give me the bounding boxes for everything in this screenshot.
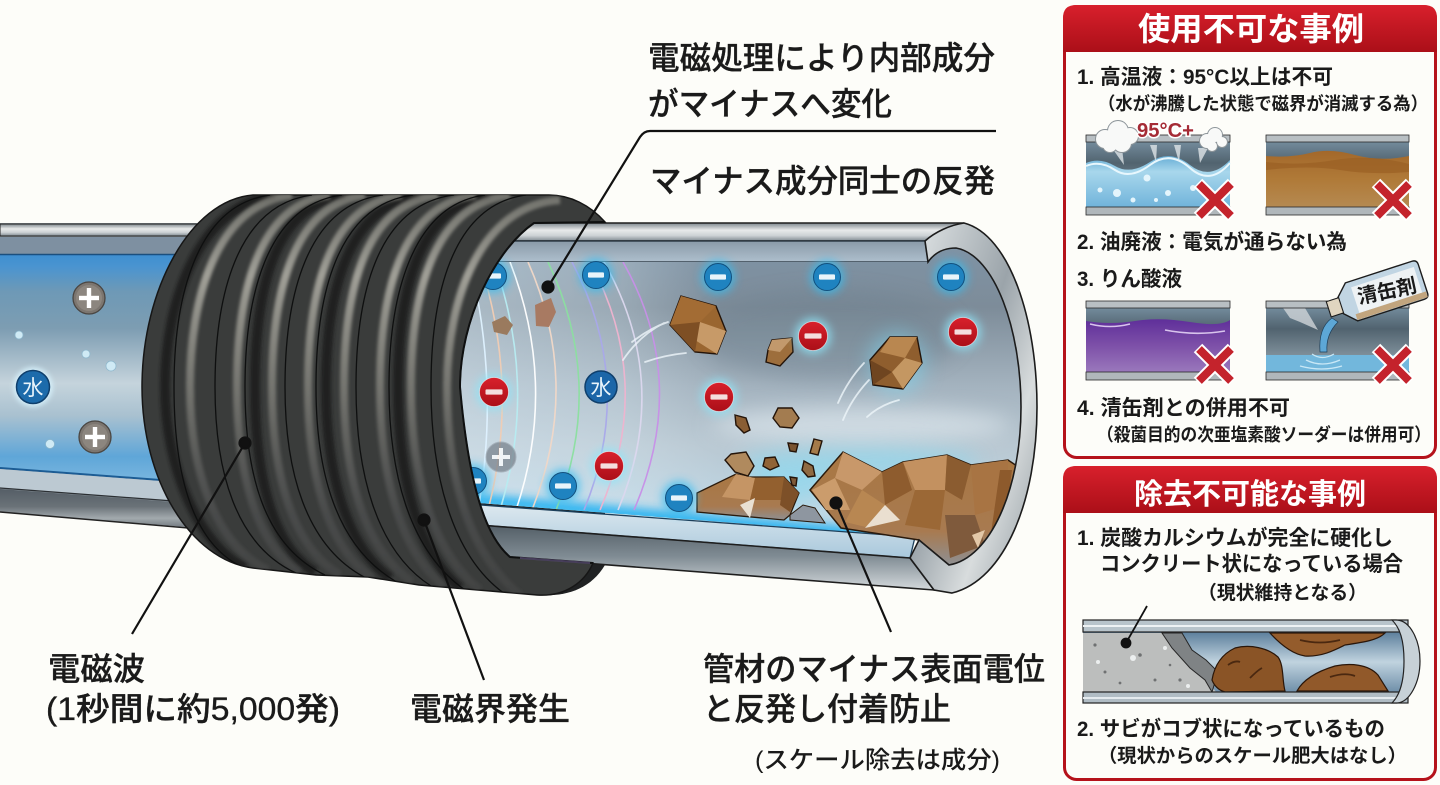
item 3 text: 3. りん酸液 [1077,268,1182,291]
icon: negative ion blue [810,260,844,294]
icon: plus charge upper [73,282,105,314]
label: repulsion: マイナス成分同士の反発 [650,163,995,199]
item 4 text: 4. 清缶剤との併用不可 [1077,397,1290,420]
leader: electromagnetic treatment [542,131,996,292]
rust lump middle [1212,646,1285,692]
icon: fading plus charge [486,442,516,472]
coil dark grooves [165,195,490,588]
panel heading: 除去不可能な事例 [1134,478,1366,511]
label: adhesion prevention: と反発し付着防止 [703,691,951,727]
pipe exterior bottom wall [440,522,934,590]
leader: electromagnetic field [418,514,484,680]
item 2 text: 2. 油廃液：電気が通らない為 [1077,230,1347,254]
pipe interior [461,248,1020,534]
leader: scale deposit [830,498,891,632]
icon: bottle: 清缶剤 [1355,273,1419,309]
image: boiler compound poured in pipe [1266,260,1429,380]
image: phosphoric acid in pipe [1086,301,1230,380]
item 1 text: （現状維持となる） [1198,582,1367,604]
item 1 text [1077,526,1403,604]
item 2 text: 2. サビがコブ状になっているもの [1077,717,1385,741]
heading: electromagnetic treatment [648,40,995,122]
pipe inner top wall [460,241,928,262]
item 1 text: コンクリート状になっている場合 [1100,553,1403,576]
icon: bottle [1323,260,1429,328]
motion streaks [623,322,899,420]
heading: electromagnetic treatment: がマイナスへ変化 [648,86,892,122]
pipe: right cutaway section [440,223,1040,593]
panel: unusable cases [1063,5,1437,458]
item 1 text: 1. 高温液：95°C以上は不可 [1077,66,1333,89]
coil back silhouette [420,195,605,595]
panel: unremovable cases [1063,466,1437,780]
label: electromagnetic field: 電磁界発生 [410,691,570,727]
scale pile: small deposit at left [697,474,825,523]
heading: electromagnetic treatment: 電磁処理により内部成分 [648,40,995,76]
icon: red cross 2 [1376,183,1410,217]
icon: negative ion blue [701,260,735,294]
label: 95 degrees: 95°C+ [1137,120,1194,142]
icon: negative ion blue [662,481,696,515]
coil separator lines [174,195,526,594]
ions inside pipe [456,258,981,515]
particle: water droplets [15,331,116,448]
leader: electromagnetic wave [132,438,250,634]
icon: negative ion red [476,374,512,410]
coil highlights [190,195,560,595]
icon: negative ion blue [456,464,490,498]
item 1 text [1077,66,1428,114]
icon: red cross 4 [1376,348,1410,382]
image: waste oil in pipe [1266,135,1409,215]
icon: steam clouds [1096,121,1227,152]
electromagnetic coil [142,195,605,595]
leader: concrete [1122,606,1147,648]
icon: red cross 3 [1198,348,1232,382]
icon: water molecule left: 水 [22,377,44,400]
label: electromagnetic wave: (1秒間に約5,000発) [46,691,340,727]
pipe opening [1392,620,1420,703]
image: boiling water in pipe [1086,120,1230,215]
panel heading: 使用不可な事例 [1138,11,1364,47]
item 4 text [1077,397,1431,445]
item 1 text: （水が沸騰した状態で磁界が消滅する為） [1098,93,1428,114]
icon: negative ion red [701,379,737,415]
icon: red cross 1 [1198,183,1232,217]
item 1 text: 1. 炭酸カルシウムが完全に硬化し [1077,526,1393,550]
label: electromagnetic wave [46,651,340,727]
icon: water molecule left [13,367,53,407]
note: scale removal: (スケール除去は成分) [755,747,1000,774]
item 2 text [1077,717,1407,767]
rust lump bottom [1297,665,1388,691]
label: adhesion prevention: 管材のマイナス表面電位 [703,651,1045,687]
scale pile: large deposit at right [810,452,1017,565]
label: adhesion prevention [703,651,1045,727]
icon: water molecule: 水 [590,377,612,400]
label: electromagnetic wave: 電磁波 [48,651,145,687]
icon: negative ion blue [934,260,968,294]
pipe inner bottom wall [440,502,915,558]
pipe exterior top wall [470,223,964,241]
glow around rocks [740,333,980,502]
image: pipe with concrete and rust [1083,606,1420,703]
icon: negative ion red [795,318,831,354]
icon: negative ion red [591,448,627,484]
rocks seen through coil haze [492,298,556,335]
icon: water molecule [585,371,617,403]
icon: negative ion blue [476,259,510,293]
pipe end ring [910,223,1037,593]
icon: plus charge lower [79,421,111,453]
icon: negative ion red [945,314,981,350]
electromagnetic wave arcs [470,262,659,510]
rust lump top [1270,633,1385,656]
item 2 text: （現状からのスケール肥大はなし） [1098,745,1407,767]
pipe: left section outside the coil [0,223,210,529]
icon: negative ion blue [546,469,580,503]
rocks: floating scale particles [492,296,922,486]
icon: negative ion blue [579,258,613,292]
